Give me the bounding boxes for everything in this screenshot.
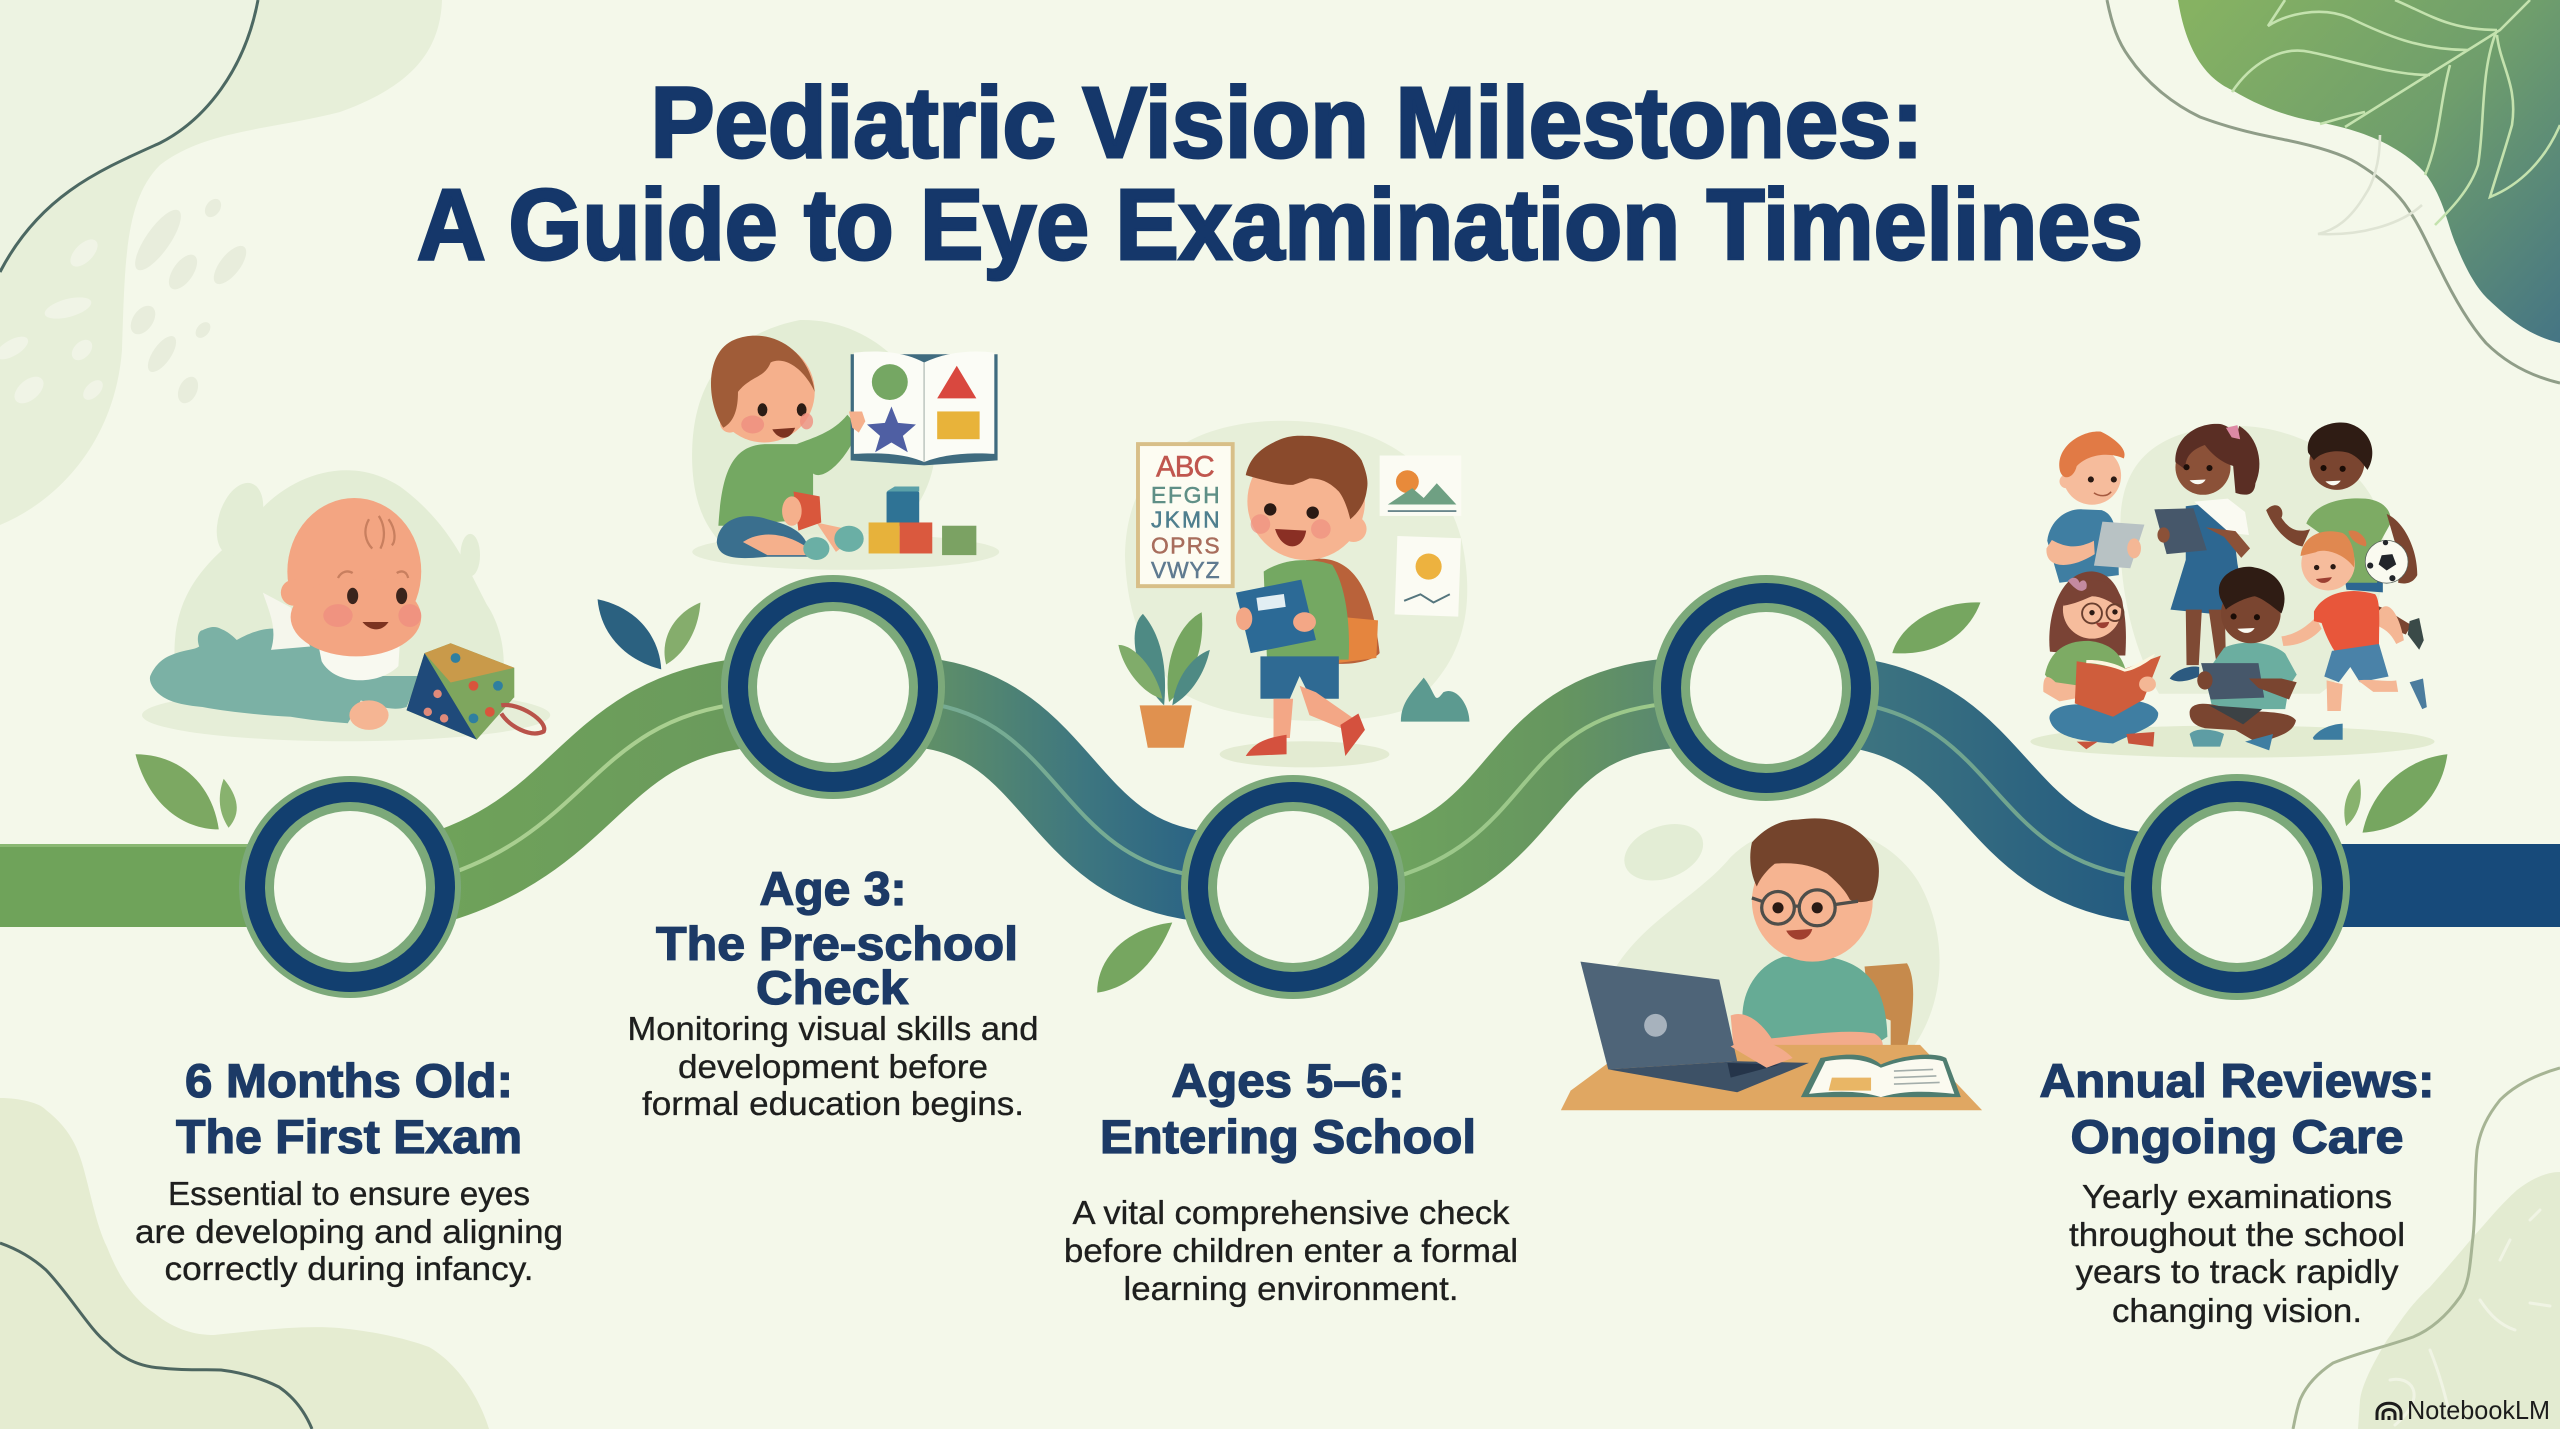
milestone ring 5 — [2124, 774, 2350, 1000]
illustration: school-age boy with book and eye chart: ABC — [1156, 451, 1215, 484]
milestone 2 label: Age 3: — [760, 862, 906, 915]
milestone ring 4 — [1653, 575, 1879, 801]
NotebookLM watermark: NotebookLM — [2407, 1395, 2550, 1425]
milestone 2 label: Check — [756, 961, 909, 1014]
milestone 2 label: development before — [678, 1048, 988, 1085]
milestone 4 label: years to track rapidly — [2076, 1253, 2399, 1290]
kid: boy with grey tablet — [2046, 432, 2144, 583]
kid: girl in pinafore with tablet — [2154, 424, 2259, 681]
milestone 1 label: 6 Months Old: — [185, 1054, 513, 1107]
illustration: school-age boy with book and eye chart: OPRS — [1151, 532, 1220, 558]
milestone 4 label: Yearly examinations — [2082, 1178, 2392, 1215]
milestone ring 3 — [1181, 775, 1405, 999]
kid: running child in red shirt — [2281, 530, 2427, 740]
milestone 4 label: throughout the school — [2069, 1216, 2405, 1253]
milestone 1 label: correctly during infancy. — [164, 1250, 534, 1287]
illustration: group of school children — [2030, 422, 2434, 758]
milestone 1 label: The First Exam — [176, 1110, 522, 1163]
milestone 1 label: Essential to ensure eyes — [168, 1175, 530, 1212]
milestone 4 label: changing vision. — [2112, 1292, 2362, 1329]
milestone 3 label: before children enter a formal — [1064, 1232, 1518, 1269]
decoration: bottom-left corner — [0, 1098, 489, 1429]
title: A Guide to Eye Examination Timelines — [417, 169, 2143, 281]
illustration: toddler pointing at shapes book with blocks — [692, 320, 999, 570]
illustration: school-age boy with book and eye chart: EFGH — [1151, 482, 1220, 508]
milestone 3 label: A vital comprehensive check — [1072, 1194, 1510, 1231]
milestone 1 label: are developing and aligning — [135, 1213, 563, 1250]
title: Pediatric Vision Milestones: — [650, 67, 1924, 179]
illustration: school-age boy with book and eye chart: JKMN — [1151, 506, 1220, 532]
decoration: top-right corner leaf blob — [2107, 0, 2560, 383]
kid: girl with glasses reading red book — [2043, 571, 2161, 749]
leaves: milestone 1 — [136, 754, 237, 829]
illustration: boy with glasses on laptop — [1561, 814, 1982, 1110]
milestone 3 label: Entering School — [1100, 1110, 1476, 1163]
milestone ring 1 — [239, 776, 461, 998]
milestone 4 label — [2040, 1054, 2434, 1329]
timeline ribbon — [0, 703, 2560, 927]
milestone ring 2 — [721, 575, 945, 799]
milestone 4 label: Ongoing Care — [2070, 1110, 2404, 1163]
milestone 2 label — [628, 862, 1038, 1122]
milestone 2 label: formal education begins. — [642, 1085, 1024, 1122]
milestone 3 label: Ages 5–6: — [1172, 1054, 1404, 1107]
kid: boy with dark tablet, sitting — [2190, 567, 2297, 750]
title — [417, 67, 2143, 281]
milestone 4 label: Annual Reviews: — [2040, 1054, 2434, 1107]
milestone 3 label — [1064, 1054, 1518, 1307]
leaves: milestone 5 — [2344, 754, 2447, 833]
decoration: bottom-right corner — [2293, 1068, 2560, 1429]
decoration: top-left corner — [0, 0, 442, 525]
illustration: school-age boy with book and eye chart: VWYZ — [1151, 557, 1220, 583]
milestone 2 label: The Pre-school — [656, 917, 1018, 970]
leaf: milestone 4 — [1892, 602, 1980, 653]
illustration: school-age boy with book and eye chart — [1118, 421, 1469, 767]
leaves: milestone 2 — [598, 599, 700, 669]
milestone 3 label: learning environment. — [1124, 1270, 1458, 1307]
milestone 1 label — [135, 1054, 563, 1287]
kid: boy with soccer ball — [2266, 422, 2424, 650]
milestone 2 label: Monitoring visual skills and — [628, 1010, 1038, 1047]
leaf: milestone 3 — [1097, 922, 1172, 993]
illustration: crawling baby with toy — [142, 470, 550, 741]
